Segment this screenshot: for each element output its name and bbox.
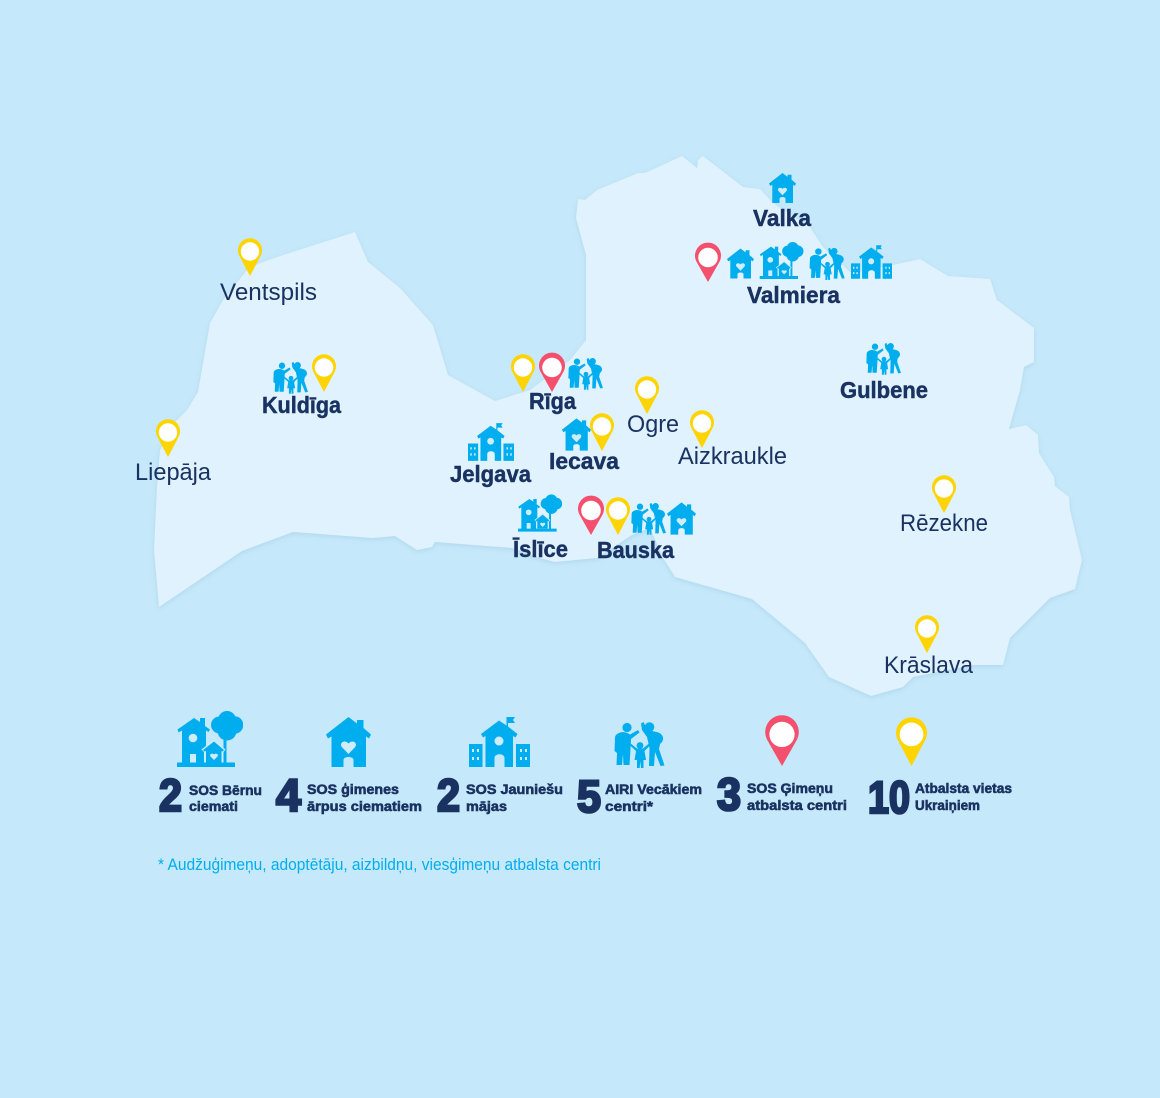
- legend: AIRI Vecākiem centri: centri*: [605, 799, 654, 814]
- legend: SOS Ģimeņu atbalsta centri: 3: [717, 769, 741, 820]
- location: Bauska: Bauska: [597, 537, 675, 563]
- legend: AIRI Vecākiem centri: AIRI Vecākiem: [605, 782, 702, 797]
- legend: AIRI Vecākiem centri: 5: [577, 771, 601, 822]
- location: Valmiera: [695, 242, 892, 308]
- legend: Atbalsta vietas Ukraiņiem: Ukraiņiem: [915, 798, 980, 813]
- legend: SOS Ģimeņu atbalsta centri: SOS Ģimeņu: [747, 781, 833, 796]
- location: Aizkraukle: Aizkraukle: [678, 443, 787, 470]
- legend: SOS ģimenes ārpus ciematiem: SOS ģimenes: [307, 782, 399, 797]
- location: Valmiera: Valmiera: [747, 282, 841, 308]
- footnote: * Audžuģimeņu, adoptētāju, aizbildņu, viesģimeņu atbalsta centri: [158, 855, 601, 874]
- legend: SOS Bērnu ciemati: ciemati: [189, 799, 238, 814]
- location: Kuldīga: [262, 354, 342, 418]
- legend: Atbalsta vietas Ukraiņiem: [868, 717, 1012, 823]
- location: Ogre: Ogre: [627, 411, 679, 438]
- legend: Atbalsta vietas Ukraiņiem: Atbalsta vietas: [915, 781, 1012, 796]
- legend: SOS Jauniešu mājas: [437, 717, 563, 821]
- legend: SOS Jauniešu mājas: 2: [437, 770, 460, 821]
- legend: SOS Jauniešu mājas: mājas: [466, 799, 507, 814]
- location: Krāslava: [884, 615, 974, 679]
- location: Krāslava: Krāslava: [884, 652, 974, 679]
- location: Kuldīga: Kuldīga: [262, 392, 342, 418]
- legend: SOS Jauniešu mājas: SOS Jauniešu: [466, 782, 563, 797]
- legend: SOS ģimenes ārpus ciematiem: [276, 717, 422, 821]
- location: Rēzekne: Rēzekne: [900, 510, 988, 537]
- location: Rīga: [511, 353, 603, 414]
- legend: SOS Ģimeņu atbalsta centri: atbalsta centri: [747, 798, 847, 813]
- location: Liepāja: [135, 419, 212, 486]
- location: Jelgava: Jelgava: [450, 461, 532, 487]
- location: Ogre: [627, 376, 679, 438]
- location: Bauska: [578, 496, 696, 563]
- location: Ventspils: Ventspils: [220, 279, 317, 306]
- location: Valka: [753, 173, 812, 231]
- legend: SOS ģimenes ārpus ciematiem: 4: [276, 770, 301, 821]
- legend: Atbalsta vietas Ukraiņiem: 10: [868, 772, 910, 823]
- legend: AIRI Vecākiem centri: [577, 722, 702, 822]
- location: Gulbene: Gulbene: [840, 377, 928, 403]
- legend: SOS Ģimeņu atbalsta centri: [717, 715, 847, 820]
- location: Rīga: Rīga: [529, 388, 577, 414]
- legend: SOS Bērnu ciemati: [159, 711, 262, 821]
- location: Iecava: Iecava: [549, 448, 620, 474]
- location: Jelgava: [450, 423, 532, 487]
- location: Aizkraukle: [678, 410, 787, 470]
- legend: SOS Bērnu ciemati: SOS Bērnu: [189, 783, 262, 798]
- legend: SOS ģimenes ārpus ciematiem: ārpus ciematiem: [307, 799, 422, 814]
- legend: SOS Bērnu ciemati: 2: [159, 770, 182, 821]
- location: Rēzekne: [900, 475, 988, 537]
- map of Latvia: [154, 156, 1082, 696]
- location: Iecava: [549, 413, 620, 474]
- location: Ventspils: [220, 238, 317, 306]
- location: Liepāja: Liepāja: [135, 459, 212, 486]
- location: Gulbene: [840, 343, 928, 403]
- location: Valka: Valka: [753, 205, 812, 231]
- location: Īslīce: Īslīce: [512, 536, 568, 562]
- location: Īslīce: [512, 494, 568, 562]
